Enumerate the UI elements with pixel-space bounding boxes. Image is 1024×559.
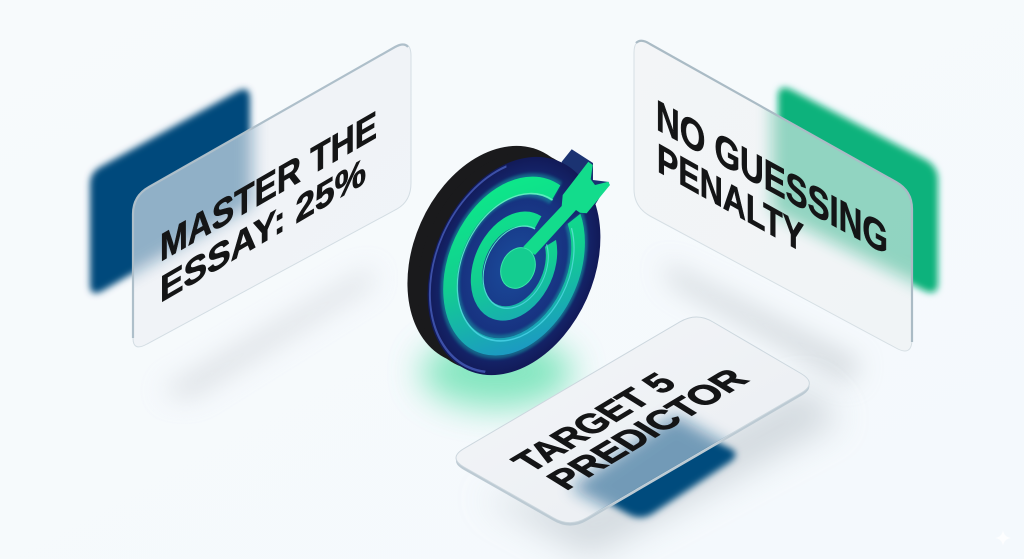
panel: master the essay (90, 44, 411, 347)
outer ring highlight (435, 175, 596, 360)
target face (395, 129, 633, 403)
bottom card thickness (456, 320, 809, 526)
bottom card blue backing (575, 418, 735, 518)
shadow: left card (160, 268, 372, 398)
bullseye (494, 242, 542, 294)
target navy fletching back (560, 149, 609, 205)
left card text: ESSAY: 25% (160, 150, 366, 311)
right card text: PENALTY (657, 135, 804, 263)
right card green backing (778, 88, 938, 292)
left card frosted blue (134, 124, 262, 284)
right card frosted green (762, 108, 911, 293)
icon: corner sparkle (995, 530, 1011, 546)
bottom card glass (456, 317, 809, 523)
outer ring glow (426, 165, 602, 367)
middle ring (462, 207, 566, 325)
left card edge highlight (133, 44, 408, 338)
outer ring (426, 165, 602, 367)
target black body (375, 118, 623, 398)
left card text: MASTER THE (160, 102, 377, 270)
panel: target 5 predictor (456, 317, 809, 526)
shadow: bottom card (480, 385, 840, 556)
bottom card frosted blue (570, 415, 745, 525)
bottom card text (502, 363, 757, 495)
bottom card text: PREDICTOR (537, 363, 757, 495)
right card glass (634, 41, 912, 351)
bottom card text: TARGET 5 (502, 367, 685, 477)
glow under target (421, 336, 573, 408)
left card glass (133, 44, 411, 347)
infographic scene (84, 40, 944, 559)
left card blue backing (90, 89, 250, 293)
panel: no guessing penalty (634, 41, 940, 351)
right card text: NO GUESSING (656, 90, 888, 265)
right card edge highlight (636, 41, 912, 342)
arrow shaft and fletching (523, 162, 610, 255)
right card text (656, 90, 888, 265)
icon: target with arrow (375, 118, 633, 403)
shadow: right card (662, 262, 860, 384)
middle ring highlight (471, 216, 561, 319)
